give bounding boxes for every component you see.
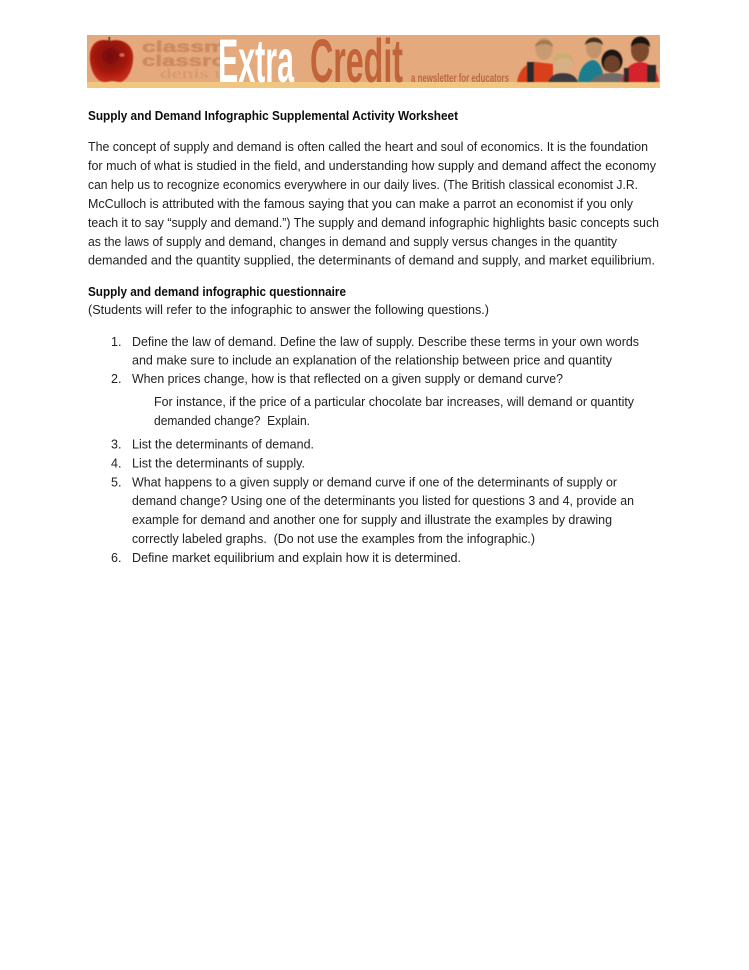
banner faded background words: classm <box>142 39 226 56</box>
introduction paragraph: teach it to say “supply and demand.”) The supply and demand infographic highlights basic concepts such <box>88 216 659 230</box>
introduction paragraph: as the laws of supply and demand, changes in demand and supply versus changes in the quantity <box>88 235 618 249</box>
question list <box>111 335 639 565</box>
question 5: example for demand and another one for supply and illustrate the examples by drawing <box>132 513 612 527</box>
student 1 <box>517 38 553 82</box>
worksheet title: Supply and Demand Infographic Supplemental Activity Worksheet <box>88 109 459 123</box>
question 1 <box>111 335 639 368</box>
student 3 <box>578 38 604 82</box>
students photo group <box>517 36 659 82</box>
questionnaire instruction: (Students will refer to the infographic to answer the following questions.) <box>88 303 489 317</box>
question 2: For instance, if the price of a particular chocolate bar increases, will demand or quantity <box>154 395 635 409</box>
introduction paragraph: The concept of supply and demand is often called the heart and soul of economics. It is the foundation <box>88 140 648 154</box>
student 4 <box>590 50 634 82</box>
banner title: Credit: Credit <box>310 27 403 95</box>
introduction paragraph: McCulloch is attributed with the famous saying that you can make a parrot an economist if you only <box>88 197 634 211</box>
banner faded background words: denis u <box>160 67 226 82</box>
banner tagline: a newsletter for educators <box>411 71 509 85</box>
introduction paragraph: can help us to recognize economics everywhere in our daily lives. (The British classical economist J.R. <box>88 178 638 192</box>
question 5: correctly labeled graphs. (Do not use the examples from the infographic.) <box>132 532 535 546</box>
banner faded background words <box>142 39 226 82</box>
student 5 <box>622 36 659 82</box>
question 1: 1. <box>111 335 121 349</box>
question 6: 6. <box>111 551 121 565</box>
icon: red apple <box>90 37 133 82</box>
banner faded background words: classro <box>142 53 226 70</box>
student 2 <box>548 51 578 82</box>
question 3: List the determinants of demand. <box>132 438 314 452</box>
question 2: 2. <box>111 372 121 386</box>
question 2 <box>111 372 635 428</box>
introduction paragraph: for much of what is studied in the field, and understanding how supply and demand affect the economy <box>88 159 657 173</box>
question 1: and make sure to include an explanation of the relationship between price and quantity <box>132 354 613 368</box>
question 4: List the determinants of supply. <box>132 456 305 470</box>
question 1: Define the law of demand. Define the law of supply. Describe these terms in your own words <box>132 335 639 349</box>
questionnaire heading: Supply and demand infographic questionnaire <box>88 285 346 299</box>
question 3: 3. <box>111 438 121 452</box>
question 2: demanded change? Explain. <box>154 414 310 428</box>
question 5: demand change? Using one of the determinants you listed for questions 3 and 4, provide an <box>132 494 634 508</box>
question 5: 5. <box>111 476 121 490</box>
question 5 <box>111 476 634 546</box>
question 2: When prices change, how is that reflected on a given supply or demand curve? <box>132 372 563 386</box>
banner title: Extra: Extra <box>218 27 295 95</box>
question 5: What happens to a given supply or demand curve if one of the determinants of supply or <box>132 476 617 490</box>
banner: Extra Credit newsletter header <box>87 27 660 95</box>
introduction paragraph <box>88 140 659 268</box>
question 6: Define market equilibrium and explain how it is determined. <box>132 551 461 565</box>
question 4: 4. <box>111 456 121 470</box>
introduction paragraph: demanded and the quantity supplied, the determinants of demand and supply, and market equilibrium. <box>88 254 655 268</box>
